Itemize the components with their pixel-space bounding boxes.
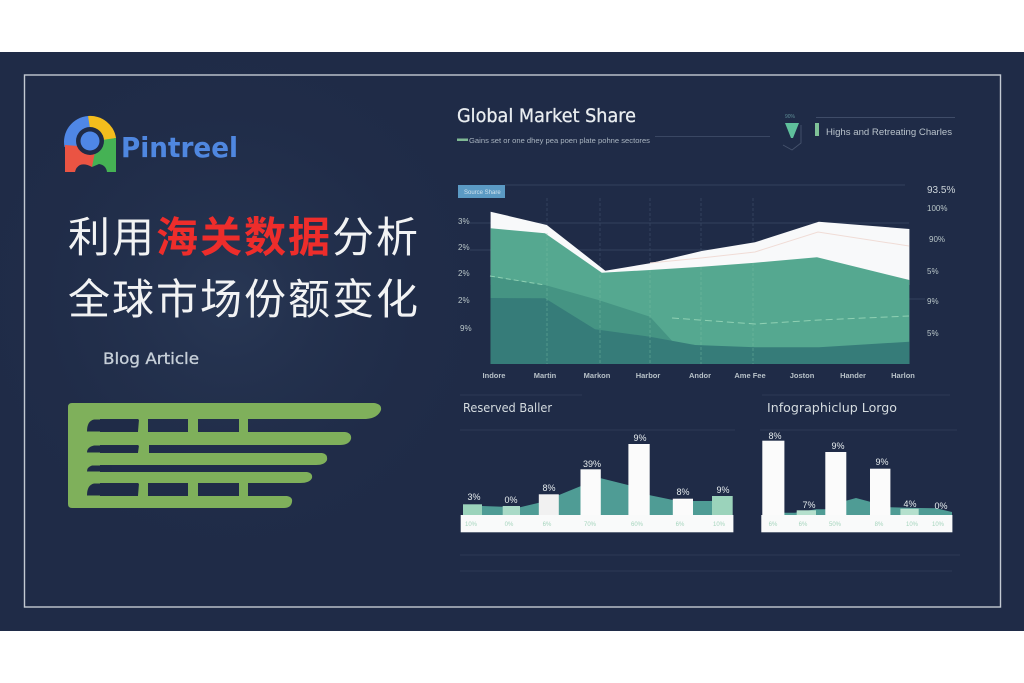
right axis labels	[927, 185, 955, 338]
icon: shield badge: 90%	[785, 114, 796, 120]
bar values: 8%	[768, 431, 782, 441]
x axis labels: Harlon	[891, 371, 915, 380]
table values: 6%	[769, 522, 778, 528]
table values: 0%	[505, 522, 514, 528]
title line 2: 全球市场份额变化	[68, 266, 420, 327]
table values: 60%	[631, 522, 644, 528]
heading: Global Market Share: Global Market Share	[457, 105, 636, 127]
table values: 8%	[875, 522, 884, 528]
bars	[762, 441, 919, 515]
title line 1: 利用海关数据分析	[68, 204, 420, 265]
x axis labels: Martin	[534, 371, 557, 380]
left axis labels	[458, 217, 472, 333]
x axis labels: Harbor	[636, 371, 660, 380]
bar values: 0%	[934, 501, 948, 511]
bar values	[768, 431, 948, 511]
area chart: market share	[458, 185, 955, 380]
chart legend tag	[458, 185, 505, 198]
title	[68, 204, 420, 327]
chart overlay lines	[490, 232, 909, 364]
right axis labels: 5%	[927, 267, 939, 276]
bar values: 7%	[802, 500, 816, 510]
table values: 50%	[829, 522, 842, 528]
bar values: 0%	[504, 495, 518, 505]
subheading with green marker: Gains set or one dhey pea poen plate pohne sectores	[469, 136, 650, 145]
bar values: 9%	[831, 441, 845, 451]
bar values: 9%	[875, 457, 889, 467]
bar chart: right	[761, 431, 952, 532]
chart legend tag: Source Share	[464, 190, 501, 196]
x axis labels: Markon	[584, 371, 611, 380]
icon: logo mark	[64, 116, 116, 172]
table strip	[761, 515, 952, 532]
frame border	[24, 75, 1000, 607]
x axis labels	[483, 371, 915, 380]
subtitle: Blog Article: Blog Article	[103, 349, 199, 368]
left axis labels: 9%	[460, 324, 472, 333]
bar values: 8%	[542, 483, 556, 493]
bar values: 4%	[903, 499, 917, 509]
table values: 10%	[713, 522, 726, 528]
heading: Infographic lup Lorgo: Infographiclup Lorgo	[767, 400, 897, 415]
bar chart: left	[461, 433, 733, 532]
left axis labels: 2%	[458, 296, 470, 305]
table values: 6%	[543, 522, 552, 528]
table values	[769, 522, 945, 528]
bar values: 39%	[583, 459, 601, 469]
bar values	[467, 433, 730, 505]
right axis labels: 93.5%	[927, 185, 955, 196]
logo wordmark: Pintreel	[121, 131, 238, 164]
dark teal area series	[491, 298, 909, 364]
table values: 10%	[932, 522, 945, 528]
table values: 6%	[676, 522, 685, 528]
x axis labels: Ame Fee	[734, 371, 766, 380]
divider lines lower section	[460, 395, 960, 571]
legend: highs and retreating charts: Highs and Retreating Charles	[826, 127, 952, 138]
bar values: 3%	[467, 492, 481, 502]
bars	[463, 444, 733, 515]
right axis labels: 90%	[929, 235, 945, 244]
right axis labels: 9%	[927, 297, 939, 306]
chart grid	[470, 185, 925, 364]
icon: green table logo	[68, 403, 381, 508]
right axis labels: 5%	[927, 329, 939, 338]
table strip	[461, 515, 733, 532]
table values	[465, 522, 726, 528]
table values: 6%	[799, 522, 808, 528]
left axis labels: 3%	[458, 217, 470, 226]
left axis labels: 2%	[458, 269, 470, 278]
x axis labels: Hander	[840, 371, 866, 380]
left axis labels: 2%	[458, 243, 470, 252]
legend: highs and retreating charts	[815, 118, 955, 138]
right axis labels: 100%	[927, 204, 947, 213]
bar values: 9%	[633, 433, 647, 443]
bar values: 8%	[676, 487, 690, 497]
table values: 10%	[906, 522, 919, 528]
table values: 10%	[465, 522, 478, 528]
icon: shield badge	[783, 114, 801, 150]
bar values: 9%	[716, 485, 730, 495]
heading: Reserved Baller: Reserved Baller	[463, 401, 552, 415]
x axis labels: Andor	[689, 371, 711, 380]
mid green area series	[491, 277, 695, 364]
x axis labels: Indore	[483, 371, 505, 380]
background area	[784, 498, 952, 515]
background area	[482, 478, 712, 515]
table values: 70%	[584, 522, 597, 528]
white area series	[491, 212, 909, 285]
green area series	[491, 228, 909, 364]
logo: Pintreel	[64, 116, 238, 172]
x axis labels: Joston	[790, 371, 815, 380]
